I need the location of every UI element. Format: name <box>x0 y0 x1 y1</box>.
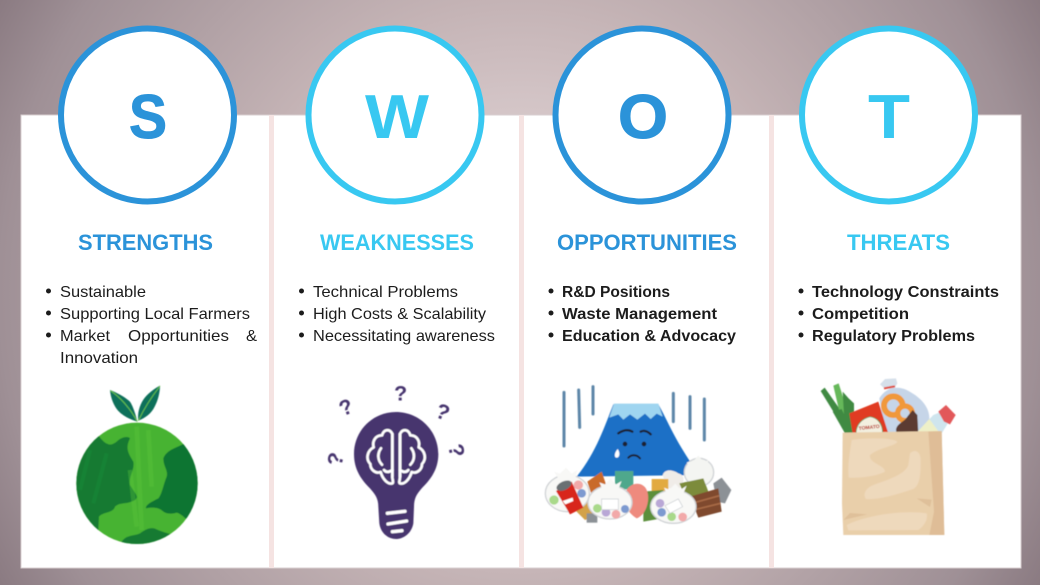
list: opportunities: Education & Advocacy <box>562 328 736 345</box>
list: threats <box>798 284 999 345</box>
heading: threats: THREATS <box>847 230 950 255</box>
icon: sad mountain surrounded by rubbish <box>545 387 731 523</box>
badge: T <box>802 28 975 202</box>
list: strengths: Supporting Local Farmers <box>60 306 250 323</box>
badge: W <box>308 28 482 202</box>
icon: grocery bag: TOMATO <box>858 424 880 432</box>
heading: weaknesses: WEAKNESSES <box>320 230 474 255</box>
list: strengths: Market <box>60 328 111 345</box>
list: opportunities: Waste Management <box>562 306 718 323</box>
list: threats: Regulatory Problems <box>812 328 975 345</box>
icon: lightbulb with brain and question marks: ? <box>336 394 357 421</box>
heading: strengths: STRENGTHS <box>78 230 213 255</box>
icon: lightbulb with brain and question marks <box>323 382 469 539</box>
badge: T: T <box>868 83 910 152</box>
list: threats: Technology Constraints <box>812 284 999 301</box>
list: strengths: Innovation <box>60 350 138 367</box>
list: opportunities <box>548 284 736 345</box>
list: strengths: Sustainable <box>60 284 146 301</box>
list: weaknesses <box>299 284 495 345</box>
list: weaknesses: Necessitating awareness <box>313 328 495 345</box>
icon: grocery bag <box>821 378 956 535</box>
panel: white board <box>21 115 1021 568</box>
list: threats: Competition <box>812 306 909 323</box>
icon: lightbulb with brain and question marks: ? <box>443 442 469 459</box>
heading: opportunities: OPPORTUNITIES <box>557 230 737 255</box>
badge: S: S <box>129 83 167 152</box>
badge: O: O <box>618 83 668 152</box>
list: weaknesses: Technical Problems <box>313 284 458 301</box>
badge: O <box>556 28 728 202</box>
icon: lightbulb with brain and question marks: ? <box>323 450 349 468</box>
icon: lightbulb with brain and question marks: ? <box>432 399 453 426</box>
list: weaknesses: High Costs & Scalability <box>313 306 486 323</box>
list: strengths: & <box>246 328 257 345</box>
icon: green globe with leaves <box>75 385 199 545</box>
badge: S <box>61 28 234 202</box>
badge: W: W <box>365 83 430 152</box>
list: strengths <box>46 284 257 367</box>
list: opportunities: R&D Positions <box>562 284 670 301</box>
list: strengths: Opportunities <box>128 328 229 345</box>
icon: lightbulb with brain and question marks: ? <box>394 382 407 406</box>
